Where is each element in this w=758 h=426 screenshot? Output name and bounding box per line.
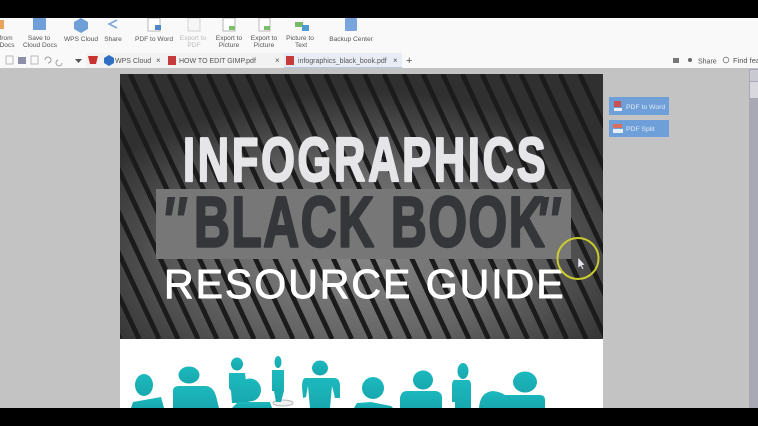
white page section [120,339,603,408]
tab labels: HOW TO EDIT GIMP.pdf [179,58,256,65]
toolbar labels: Picture [219,42,240,49]
toolbar labels [0,35,374,49]
ground ring [273,400,293,406]
share and search: Share [698,58,717,66]
cover banner [120,74,603,339]
toolbar labels: Export to [216,35,243,42]
person 8 [400,370,442,408]
person 2 [173,366,219,408]
active tab [284,53,402,68]
title: resource guide: RESOURCE GUIDE [164,261,566,307]
toolbar ribbon [0,18,758,52]
cursor highlight ring [558,238,598,279]
opening quote: " [159,182,188,265]
closing quote: " [533,182,562,265]
tab labels: infographics_black_book.pdf [298,58,387,65]
tab labels: WPS Cloud [115,58,151,65]
person 10 [479,372,545,408]
mouse pointer [578,258,585,270]
toolbar labels: Export to [180,35,207,42]
toolbar labels: Cloud Docs [23,42,58,49]
button: pdf split: PDF Split [626,126,655,133]
toolbar labels: PDF to Word [135,36,173,43]
title: infographics: INFOGRAPHICS [183,127,548,195]
teal people illustration [131,356,545,408]
toolbar labels: Picture to [286,35,314,42]
toolbar labels: Backup Center [329,36,374,43]
highlight band [156,189,571,259]
person 5 [272,356,284,402]
title: black book: BLACK BOOK [194,183,546,262]
tab bar [0,52,758,68]
person 7 [354,377,393,408]
top letterbox bar [0,0,758,18]
toolbar labels: Export to [251,35,278,42]
person 1 [131,374,164,408]
button: pdf to word: PDF to Word [626,104,665,111]
tab labels: + [406,55,412,67]
toolbar labels: Picture [254,42,275,49]
person 9 [452,363,471,408]
toolbar labels: PDF [187,42,201,49]
toolbar labels: Share [104,36,122,43]
person 6 [302,360,340,408]
tab labels: × [156,56,161,65]
person 3 [229,358,249,403]
toolbar labels: Save to [28,35,51,42]
side buttons [609,97,669,137]
scrollbar [749,69,758,408]
bottom letterbox bar [0,408,758,426]
quick access icons [6,55,294,66]
share and search [673,56,758,66]
toolbar icons [0,18,357,33]
toolbar labels: Text [295,42,307,49]
person 4 [232,378,272,408]
tab labels: × [393,56,398,65]
toolbar labels: WPS Cloud [64,36,98,43]
tab labels: × [275,56,280,65]
tab labels [115,55,412,67]
